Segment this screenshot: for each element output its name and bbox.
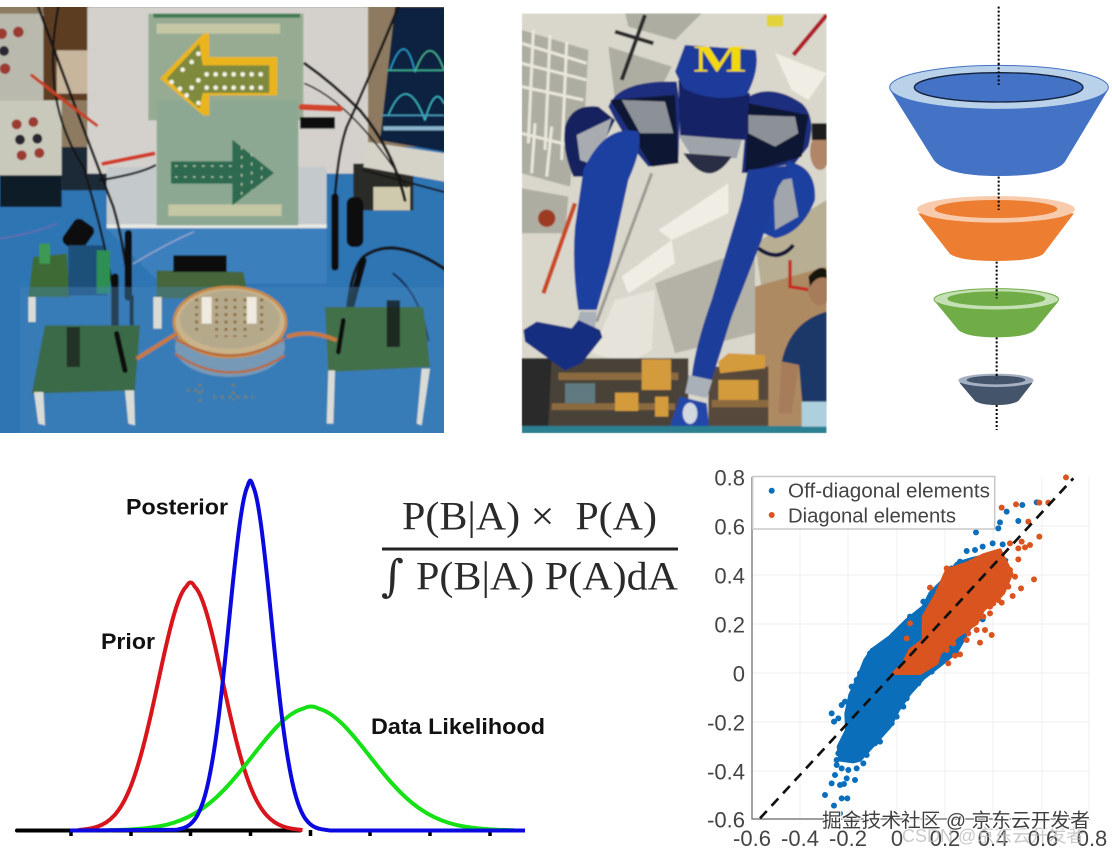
axis dotted lines xyxy=(997,7,999,430)
diagonal points xyxy=(893,477,1066,673)
x axis labels: -0.2 xyxy=(829,826,867,851)
left shoulder xyxy=(608,82,680,167)
coil receiver disc xyxy=(175,317,285,377)
right thigh xyxy=(692,165,793,380)
oscilloscope xyxy=(380,7,447,152)
multimeter bottom xyxy=(0,100,62,175)
wires xyxy=(38,7,447,334)
right power board xyxy=(325,307,430,372)
right shoulder xyxy=(742,91,811,173)
red pipe and dark pipe xyxy=(543,203,575,293)
man: arm xyxy=(778,362,799,413)
man: shirt xyxy=(782,312,827,405)
probe bodies xyxy=(60,117,363,254)
Michigan M logo: M xyxy=(693,39,747,81)
ceiling panels xyxy=(522,13,702,233)
lit yellow arrow xyxy=(160,34,277,115)
y axis labels: 0.2 xyxy=(714,612,745,638)
copper traces xyxy=(137,334,337,359)
coil reflection dots xyxy=(187,384,253,405)
x axis labels: -0.4 xyxy=(781,826,819,851)
off-diagonal points xyxy=(825,502,1037,813)
x axis labels: 0.8 xyxy=(1077,826,1107,851)
legend box: Diagonal elements xyxy=(788,505,956,527)
orange funnel xyxy=(917,196,1075,261)
scatter points xyxy=(760,477,1073,818)
lower area and shelves xyxy=(522,358,688,427)
acrylic platform xyxy=(20,287,447,434)
label: Posterior: Posterior xyxy=(126,494,228,520)
chin xyxy=(683,153,732,173)
y axis labels xyxy=(707,466,745,832)
right foot xyxy=(670,397,709,426)
fraction bar xyxy=(382,548,678,550)
left power board xyxy=(32,325,140,394)
chart: diagonal and off-diagonal scatter plot xyxy=(707,466,1107,851)
right hip xyxy=(763,162,815,238)
brick wall xyxy=(755,267,827,427)
acrylic backboard xyxy=(87,7,368,174)
torso xyxy=(678,80,750,140)
x axis labels: 0 xyxy=(891,826,903,851)
diagram: stacked funnel network layers xyxy=(890,7,1108,430)
y axis labels: -0.4 xyxy=(707,760,745,784)
dark area under instruments xyxy=(0,174,62,207)
y axis labels: 0.4 xyxy=(714,564,745,588)
posterior curve xyxy=(70,480,525,830)
slate funnel xyxy=(958,374,1034,405)
y axis labels: 0.8 xyxy=(714,466,745,490)
waist band xyxy=(678,135,742,158)
y axis labels: 0 xyxy=(733,662,745,686)
legend box: Off-diagonal elements xyxy=(788,481,990,503)
y axis labels: -0.6 xyxy=(707,808,745,832)
small control boards xyxy=(28,254,70,297)
green LED panel xyxy=(148,14,303,120)
right ankle xyxy=(685,375,712,398)
dashed identity line xyxy=(760,478,1073,818)
x axis labels xyxy=(733,826,1107,851)
wall backdrop xyxy=(0,4,447,147)
x axis labels: 0.2 xyxy=(930,826,960,851)
unlit green arrow xyxy=(171,140,274,205)
left hip dark shell xyxy=(564,106,615,177)
man: head xyxy=(808,271,832,306)
photo: bipedal Michigan robot in lab xyxy=(522,13,827,434)
cables behind right side xyxy=(353,164,413,210)
ceiling background xyxy=(522,13,827,433)
person behind robot xyxy=(810,133,830,170)
data likelihood curve xyxy=(108,706,514,830)
axes xyxy=(752,477,1090,819)
chart: Bayesian prior, posterior and likelihood curves xyxy=(17,480,545,836)
left ankle xyxy=(577,312,597,328)
x axis labels: -0.6 xyxy=(733,826,771,851)
photo: wireless power transfer bench setup xyxy=(0,7,444,433)
x axis and ticks xyxy=(17,830,490,836)
watermark: Juejin: 掘金技术社区 @ 京东云开发者 xyxy=(822,810,1090,832)
label: Data Likelihood: Data Likelihood xyxy=(371,714,545,739)
left foot xyxy=(523,320,602,371)
left thigh xyxy=(574,130,640,310)
green funnel xyxy=(934,289,1059,337)
multimeter top xyxy=(0,14,43,100)
blue funnel xyxy=(890,63,1108,176)
left hip gray joint xyxy=(577,118,612,167)
integral sign: ∫ xyxy=(381,551,404,602)
y axis labels: -0.2 xyxy=(707,710,745,736)
legend box xyxy=(753,476,995,529)
man: jeans xyxy=(802,402,827,427)
label: Prior: Prior xyxy=(101,629,155,654)
denominator: P(B|A) P(A)dA xyxy=(416,554,678,598)
left rod xyxy=(597,173,652,322)
prior curve xyxy=(78,582,302,830)
teal strip xyxy=(522,426,827,433)
table surface xyxy=(0,4,447,437)
x axis labels: 0.6 xyxy=(1028,826,1058,851)
acrylic stand base xyxy=(107,228,327,284)
y axis labels: 0.6 xyxy=(714,514,745,540)
numerator: P(B|A) × P(A) xyxy=(402,494,657,538)
watermark: CSDN: CSDN @京东云开发者 xyxy=(902,826,1084,846)
head xyxy=(675,45,757,98)
x axis labels: 0.4 xyxy=(978,826,1008,851)
grid lines xyxy=(752,477,1089,819)
formula: Bayes denominator fraction xyxy=(381,494,678,602)
probe tips over boards xyxy=(117,320,343,370)
